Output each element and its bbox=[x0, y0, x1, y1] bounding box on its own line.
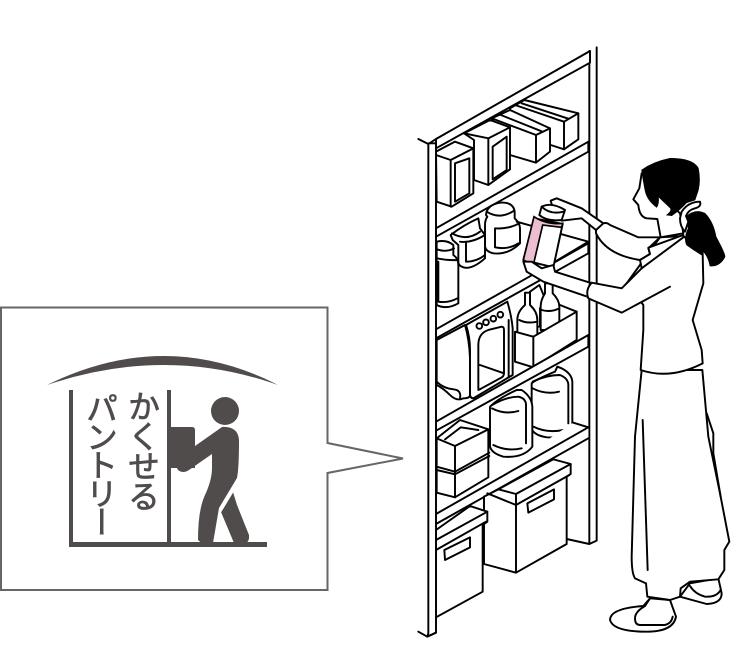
logo box bbox=[171, 427, 195, 468]
logo roof arc bbox=[47, 356, 278, 385]
skirt bbox=[632, 370, 729, 600]
appliance and water tank bbox=[437, 302, 513, 399]
logo text: pantry: パントリー bbox=[82, 392, 118, 535]
shelf 4 bbox=[436, 423, 588, 524]
far arm bbox=[596, 223, 660, 260]
jars on third shelf bbox=[490, 367, 572, 457]
far hand bbox=[551, 198, 603, 230]
scrunchie bbox=[680, 202, 700, 232]
top shelf boxes bbox=[436, 100, 578, 207]
skirt and shoes bbox=[610, 370, 729, 632]
body bbox=[627, 236, 703, 374]
shelf 4 fill bbox=[436, 423, 588, 524]
far shoe bbox=[680, 578, 722, 604]
near hand bbox=[523, 262, 590, 297]
shelf 2 back edge bbox=[517, 222, 588, 262]
hair bbox=[642, 158, 699, 216]
storage boxes bbox=[436, 459, 571, 617]
storage box small bbox=[436, 506, 487, 617]
shelf: left post bbox=[418, 139, 436, 637]
logo: hidden pantry bbox=[47, 356, 278, 547]
near arm bbox=[586, 268, 670, 313]
stacked low boxes bbox=[437, 420, 489, 497]
logo walls and floor bbox=[69, 390, 267, 547]
bottle label pink bbox=[523, 217, 563, 265]
shelf 2 bbox=[436, 243, 588, 338]
bottle bbox=[523, 205, 565, 267]
shelf unit bbox=[418, 47, 597, 637]
logo person bbox=[176, 397, 249, 545]
near shoe bbox=[610, 598, 676, 632]
shelf: right post and top beam bbox=[436, 47, 597, 544]
shelf 3 bbox=[436, 335, 588, 431]
woman bbox=[523, 158, 729, 632]
shelf 1 bbox=[436, 142, 588, 237]
collar bbox=[640, 235, 683, 268]
callout: speech bubble bbox=[1, 308, 403, 590]
bottles in crate bbox=[515, 283, 577, 367]
storage box large bbox=[484, 459, 571, 573]
jars on second shelf bbox=[437, 203, 520, 307]
logo text: kakuseru: かくせる bbox=[124, 390, 160, 510]
face bbox=[633, 173, 683, 237]
ponytail bbox=[685, 211, 725, 266]
